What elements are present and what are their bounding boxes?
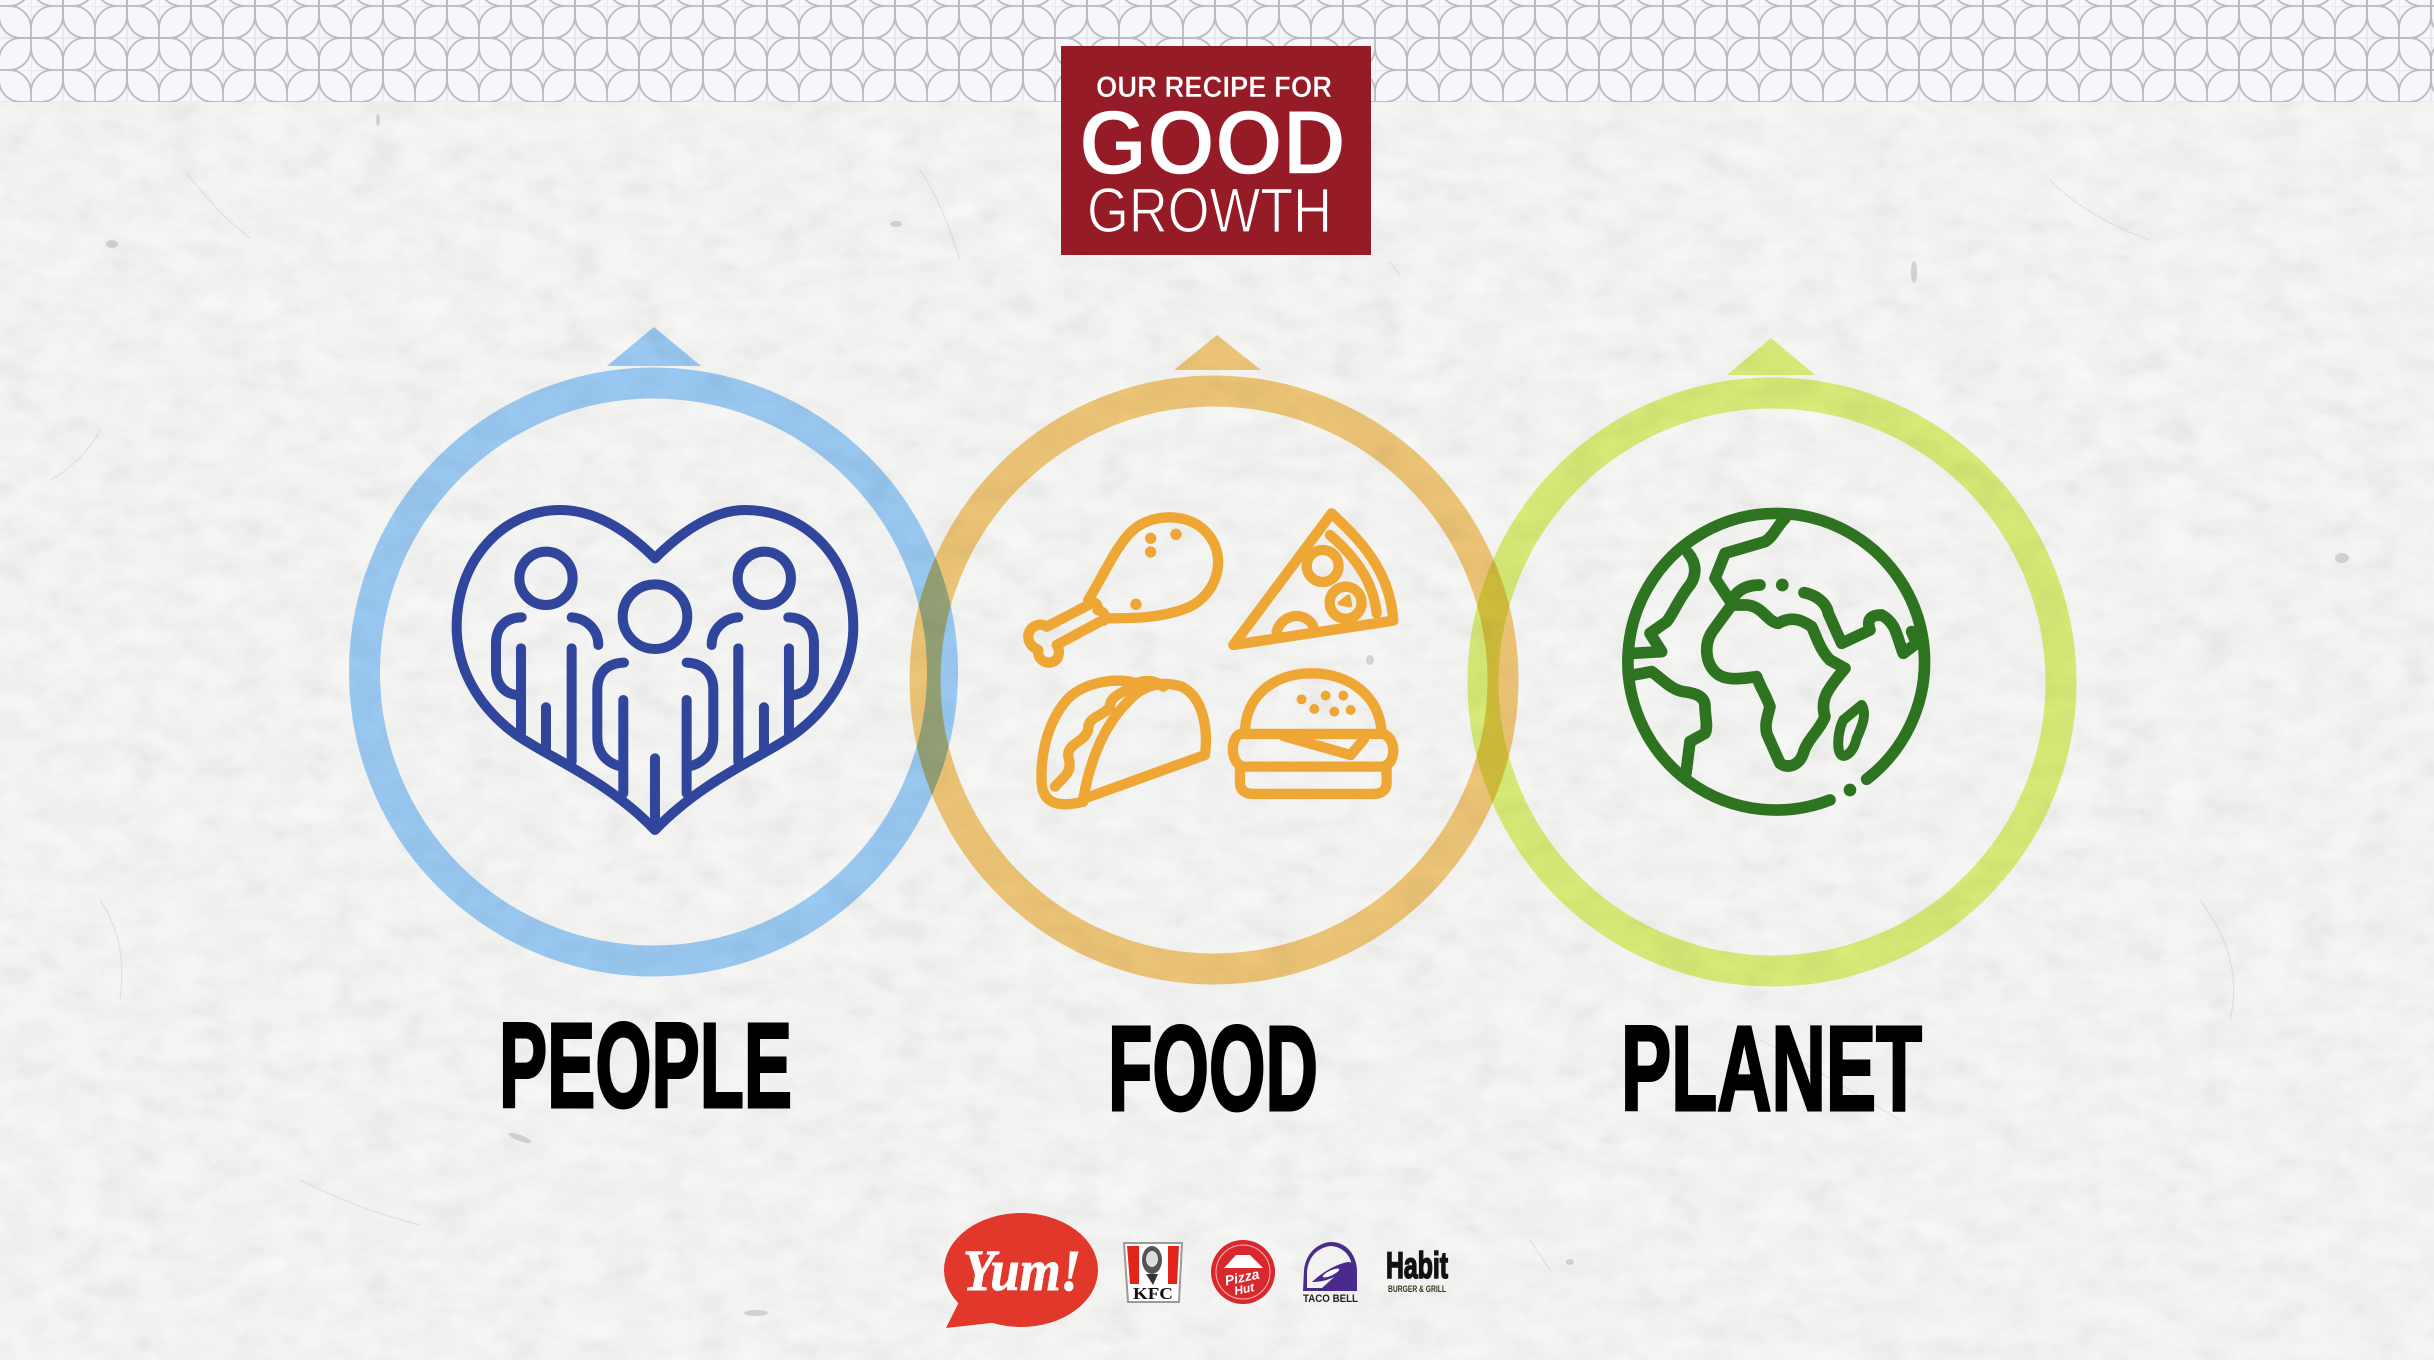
logo: kfc <box>1124 1243 1182 1303</box>
icon: burger <box>1233 673 1393 794</box>
icon: food group <box>1028 513 1393 804</box>
title badge: our recipe for good growth: GOOD <box>1079 92 1346 194</box>
logo: yum <box>944 1213 1098 1328</box>
logo: habit <box>1386 1245 1448 1294</box>
ring: planet (green) <box>1483 338 2061 971</box>
logo: pizza hut: Hut <box>1233 1280 1256 1298</box>
logo: pizza hut: Pizza <box>1223 1266 1261 1289</box>
logo: taco bell <box>1303 1242 1358 1305</box>
label: people: PEOPLE <box>499 997 792 1133</box>
title badge: our recipe for good growth: GROWTH <box>1087 176 1332 246</box>
logo: taco bell: TACO BELL <box>1303 1293 1358 1305</box>
title badge: our recipe for good growth: OUR RECIPE FOR <box>1096 71 1332 104</box>
logo: kfc: KFC <box>1133 1284 1173 1303</box>
logo: pizza hut <box>1211 1240 1275 1304</box>
ring: people (blue) <box>364 327 942 961</box>
ring: food (orange) <box>925 335 1503 969</box>
logo: habit: BURGER & GRILL <box>1388 1284 1446 1294</box>
label: food: FOOD <box>1108 1000 1318 1136</box>
icon: chicken drumstick <box>1028 517 1218 663</box>
icon: heart with people <box>457 510 853 830</box>
label: planet: PLANET <box>1621 1000 1922 1136</box>
icon: globe <box>1628 513 1925 810</box>
decorative lattice band <box>0 0 2434 102</box>
logo: yum: Yum! <box>963 1238 1081 1303</box>
logo: habit: Habit <box>1386 1245 1448 1286</box>
icon: taco <box>1041 681 1206 804</box>
title badge: our recipe for good growth <box>1061 46 1371 255</box>
icon: pizza slice <box>1233 513 1393 645</box>
